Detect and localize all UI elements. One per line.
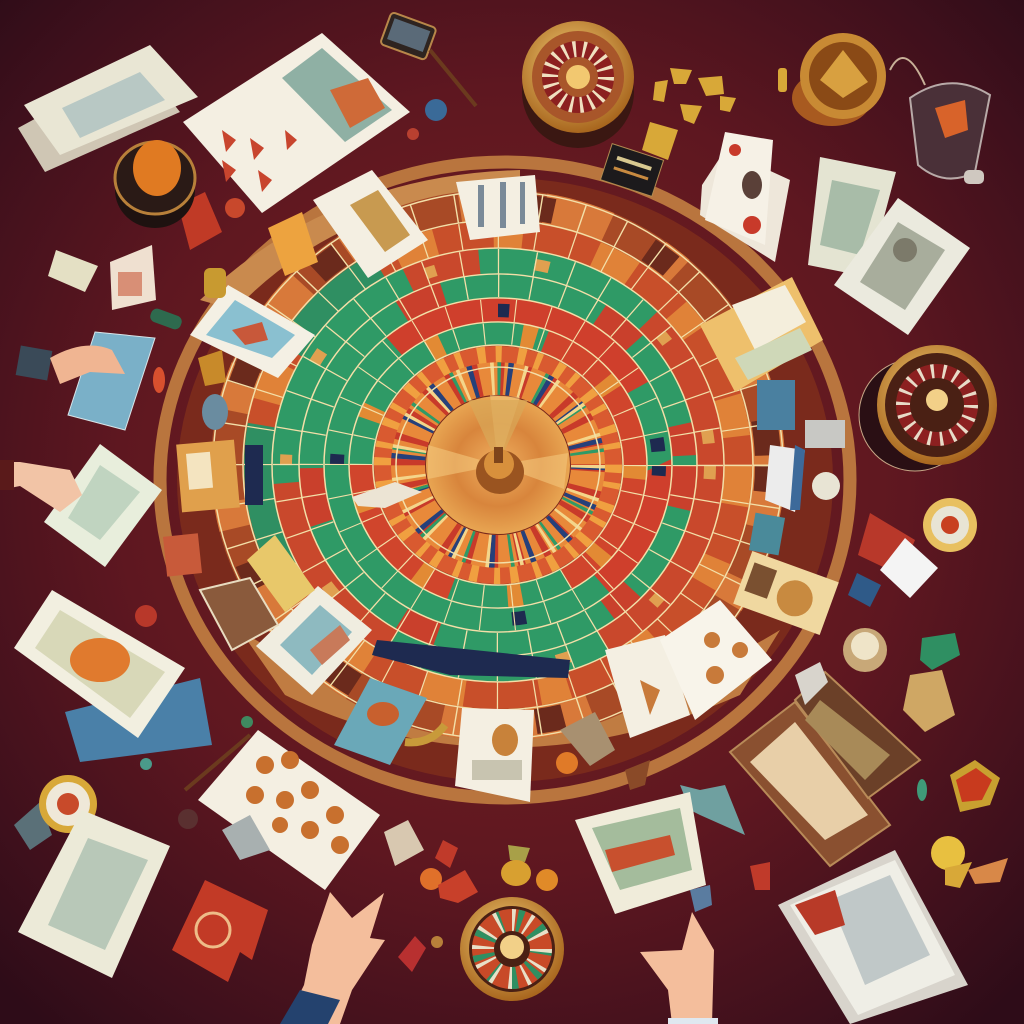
right roulette wheel	[859, 345, 997, 471]
golden cone	[426, 396, 570, 534]
smartphone top	[380, 12, 437, 60]
left lower blue card	[256, 586, 372, 695]
red envelope	[172, 880, 268, 982]
small receipts left	[48, 245, 156, 310]
bottom right paper	[778, 850, 968, 1024]
open booklet	[183, 33, 410, 213]
tan tag	[903, 670, 955, 732]
blue brochure under wheel	[334, 678, 427, 765]
right papers	[808, 157, 970, 335]
small note on cone	[352, 482, 422, 508]
navy label left	[245, 445, 263, 505]
wooden upper arc	[200, 170, 520, 310]
navy label strip	[372, 640, 570, 678]
wooden lower tray	[240, 630, 780, 748]
right cards beside wheel	[749, 380, 845, 555]
gold tray handle	[405, 725, 445, 742]
glass lantern	[890, 58, 990, 184]
gold coins right	[931, 836, 1008, 888]
hand right reaching	[640, 912, 718, 1024]
green tag	[920, 633, 960, 670]
outermost brown ring	[213, 191, 783, 739]
hand left reaching	[280, 892, 385, 1024]
central betting wheel	[160, 162, 850, 798]
green drop	[917, 779, 927, 801]
red chip	[225, 198, 245, 218]
small dark stick	[185, 735, 250, 790]
top left papers	[18, 45, 198, 172]
small gold chip	[923, 498, 977, 552]
large orange paper left	[14, 590, 212, 762]
red playing cards top right	[700, 132, 790, 262]
pricing sheet bottom left	[198, 730, 380, 890]
hand on card	[0, 444, 162, 567]
centre bottom chips	[398, 840, 558, 972]
fan of playing cards top centre	[456, 175, 540, 240]
right bottom small pieces	[680, 785, 770, 912]
open wooden box	[730, 672, 920, 866]
glass dice	[178, 809, 424, 866]
cell dividers	[213, 191, 783, 739]
top roulette wheel	[522, 21, 634, 148]
left dark jar	[115, 140, 222, 250]
red playing cards bottom centre right	[605, 600, 772, 738]
top right brass jar	[792, 33, 886, 126]
small red chips	[407, 128, 419, 140]
brochure upper right of wheel	[700, 277, 823, 392]
glass pieces under wheel	[556, 712, 650, 790]
stick	[430, 50, 476, 106]
yellow cards on wheel left	[163, 533, 315, 650]
chip beside wheel	[135, 605, 253, 770]
bottom centre map card	[575, 792, 706, 914]
trinkets left	[149, 268, 228, 430]
black sign	[600, 144, 664, 196]
red gem	[950, 760, 1000, 812]
hand on tablet	[16, 332, 155, 430]
tan brochure left	[176, 440, 240, 512]
blue picture card left	[190, 285, 315, 378]
bottom left sheet	[18, 810, 170, 978]
top gold pieces	[642, 68, 787, 160]
beige coupon	[733, 551, 839, 635]
card stack with brochure	[313, 170, 428, 278]
bottom roulette wheel	[460, 897, 564, 1001]
medal and glass bottom left	[14, 775, 97, 850]
blue chip	[425, 99, 447, 121]
small device	[795, 662, 828, 705]
right card pair	[848, 513, 938, 607]
orange note	[268, 212, 318, 276]
outer wooden rim	[160, 162, 850, 798]
cards under wheel	[455, 708, 534, 802]
hub spindle	[476, 447, 524, 494]
coin cup	[843, 628, 887, 672]
